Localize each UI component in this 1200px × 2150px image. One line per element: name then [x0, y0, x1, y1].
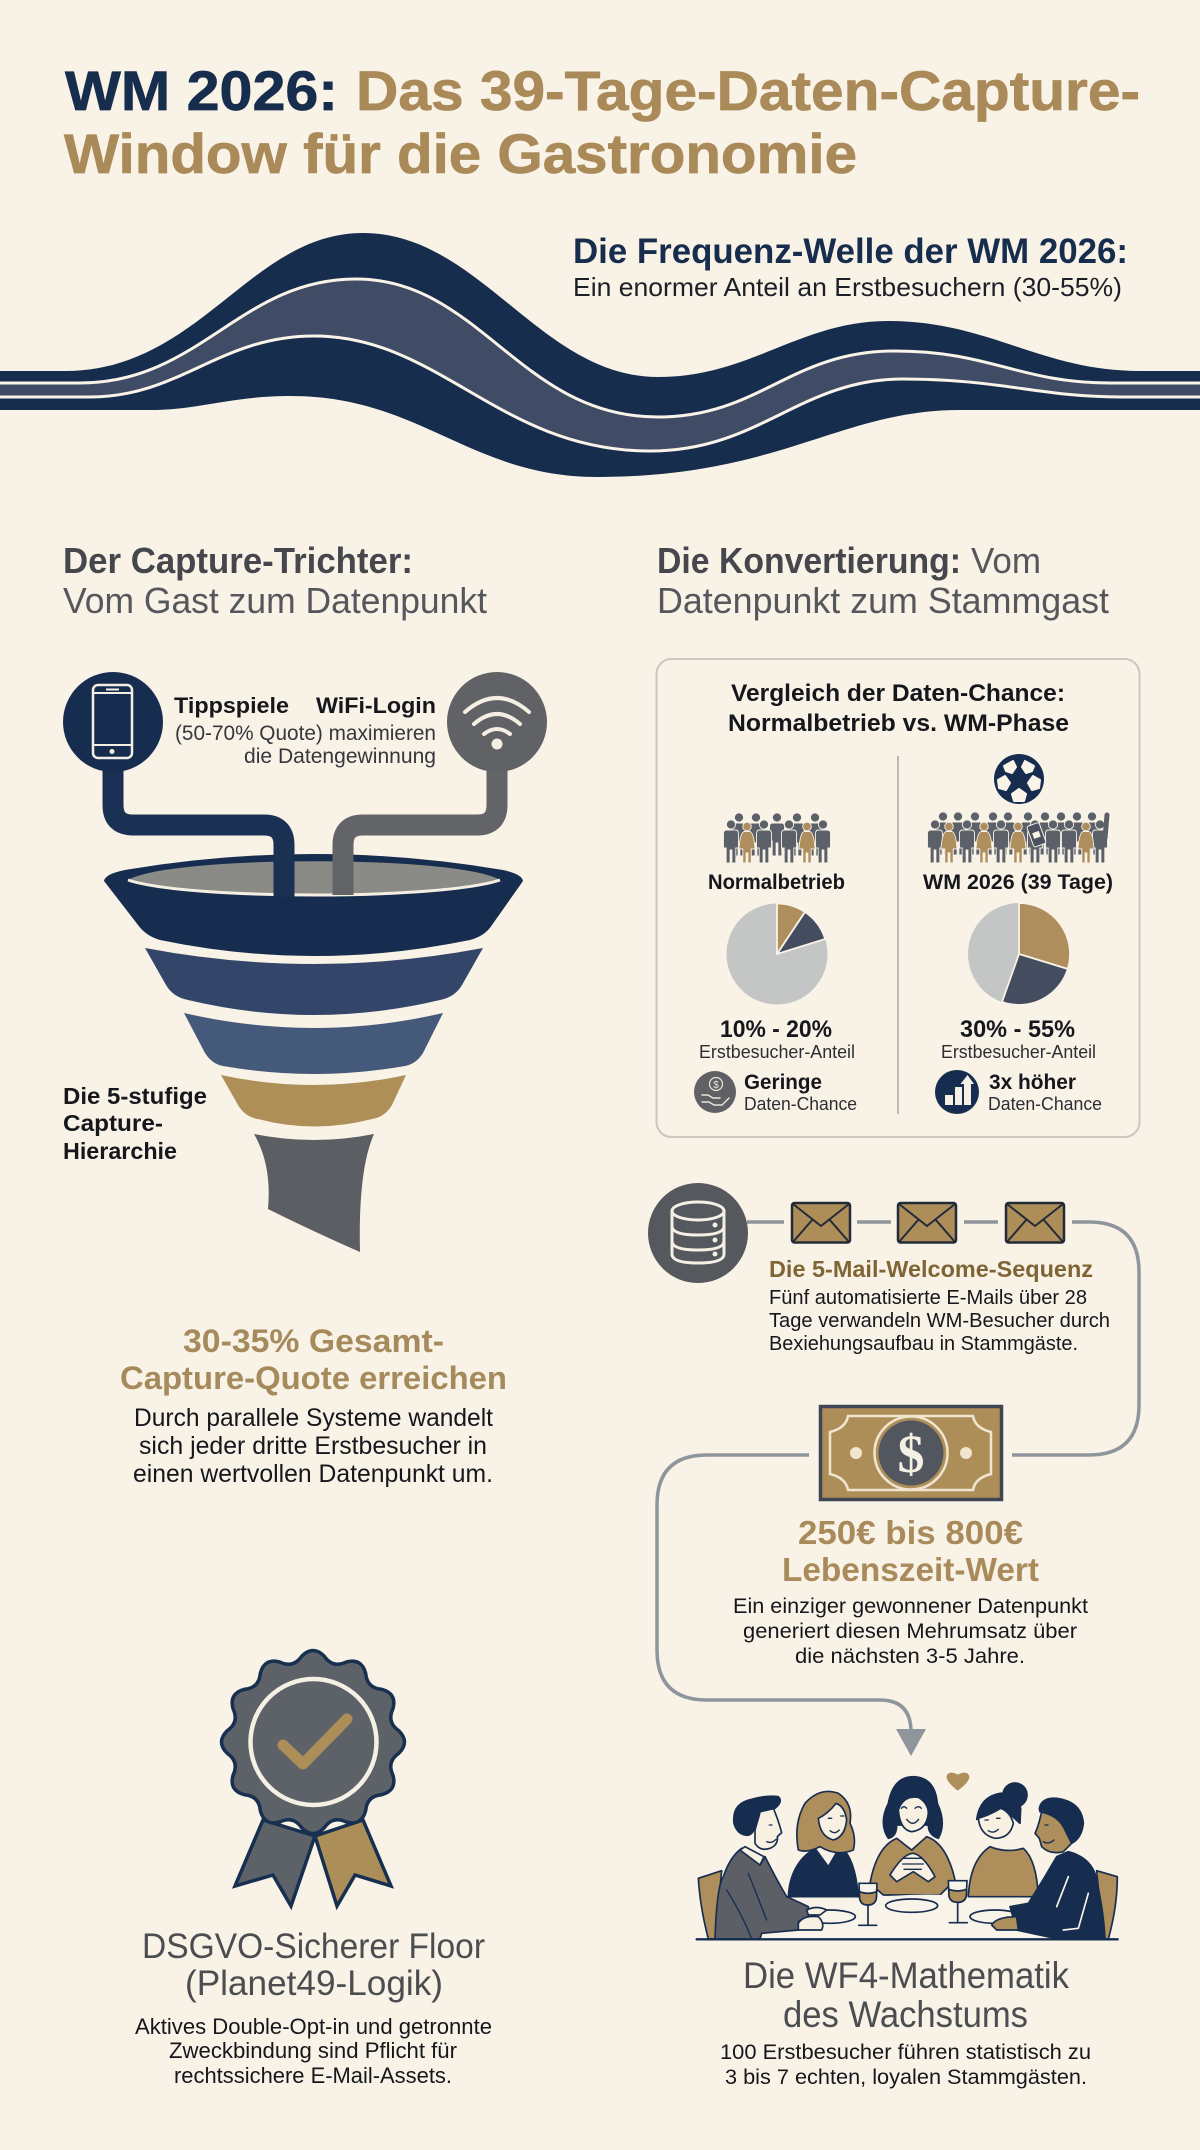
icon: rising bars — [935, 1070, 979, 1114]
text: lifetime value: die nächsten 3-5 Jahre. — [795, 1644, 1025, 1668]
funnel band 5 — [254, 1134, 374, 1252]
icon: banknote — [820, 1406, 1002, 1500]
seal — [222, 1650, 404, 1834]
title — [64, 59, 1140, 185]
stat: normal share: 10% - 20% — [720, 1016, 832, 1043]
text: funnel label: Capture- — [63, 1110, 163, 1136]
text: capture channels: die Datengewinnung — [244, 745, 436, 768]
heading: capture funnel: Der Capture-Trichter: — [63, 540, 413, 581]
heart — [947, 1773, 969, 1791]
icon: wifi — [447, 672, 547, 772]
wave heading: Die Frequenz-Welle der WM 2026: — [573, 232, 1128, 271]
stat: WM share: Erstbesucher-Anteil — [941, 1042, 1096, 1062]
wave heading — [573, 232, 1128, 302]
text: GDPR — [135, 1927, 492, 2088]
funnel band 4 — [221, 1075, 406, 1126]
label: normal: Normalbetrieb — [708, 871, 845, 894]
text: capture channels: Tippspiele — [174, 693, 289, 718]
pie chart: normal — [726, 904, 828, 1004]
text: capture quote: Capture-Quote erreichen — [120, 1360, 507, 1396]
text: capture quote — [120, 1323, 507, 1488]
text: funnel label: Hierarchie — [63, 1138, 177, 1164]
text: WF4 math: des Wachstums — [783, 1994, 1028, 2035]
text: funnel label: Die 5-stufige — [63, 1083, 207, 1109]
icon: mail 3 — [1006, 1203, 1064, 1242]
heading: conversion — [657, 540, 1109, 621]
icon: large crowd — [928, 812, 1108, 863]
funnel band 1 with opening — [104, 854, 523, 956]
guest: woman with bun — [968, 1783, 1038, 1897]
table top — [760, 1895, 1058, 1939]
text: GDPR: DSGVO-Sicherer Floor — [142, 1927, 485, 1966]
icon: low chance hand — [694, 1071, 736, 1113]
heading: capture funnel — [63, 540, 487, 621]
icon: mail 1 — [792, 1203, 850, 1242]
text: low chance: Daten-Chance — [744, 1094, 857, 1114]
illustration: guests at table — [697, 1773, 1118, 1939]
guest: man left — [715, 1796, 827, 1939]
text: welcome sequence: Bexiehungsaufbau in Stammgäste. — [769, 1333, 1078, 1355]
icon: GDPR seal — [222, 1650, 404, 1906]
text: capture quote: 30-35% Gesamt- — [183, 1323, 444, 1359]
arrow: flow from money to guests — [657, 1455, 926, 1756]
heading: conversion: Datenpunkt zum Stammgast — [657, 580, 1109, 621]
stat: WM share — [941, 1016, 1096, 1062]
text: low chance: Geringe — [744, 1071, 822, 1094]
text: capture quote: sich jeder dritte Erstbesucher in — [139, 1432, 487, 1460]
heading: capture funnel: Vom Gast zum Datenpunkt — [63, 580, 487, 621]
guest: man right — [992, 1798, 1105, 1939]
ribbon right — [315, 1820, 391, 1906]
wine glasses — [859, 1881, 967, 1925]
text: low chance — [744, 1071, 857, 1114]
guest: woman left — [788, 1791, 858, 1897]
text: capture quote: einen wertvollen Datenpunkt um. — [133, 1460, 493, 1488]
text: capture channels — [174, 693, 436, 768]
text: lifetime value: Lebenszeit-Wert — [782, 1551, 1039, 1588]
pipe: wifi to funnel — [343, 760, 497, 895]
text: welcome sequence: Tage verwandeln WM-Besucher durch — [769, 1310, 1110, 1332]
chairs — [698, 1871, 1117, 1939]
text: GDPR: (Planet49-Logik) — [185, 1964, 443, 2003]
panel title — [728, 680, 1069, 737]
divider — [897, 756, 899, 1114]
icon: database — [648, 1183, 748, 1283]
icon: low chance hand: $ — [713, 1080, 719, 1091]
panel: comparison — [656, 659, 1140, 1137]
text: capture channels: WiFi-Login — [316, 693, 436, 718]
table edge — [697, 1936, 1118, 1943]
heading: conversion: Vom — [971, 540, 1041, 581]
text: high chance: 3x höher — [989, 1071, 1076, 1094]
chart: frequency wave — [0, 233, 1200, 477]
text: lifetime value — [733, 1514, 1088, 1668]
guest: center woman — [870, 1777, 955, 1895]
icon: small crowd — [724, 813, 830, 863]
title: Window für die Gastronomie — [64, 122, 857, 185]
panel title: Normalbetrieb vs. WM-Phase — [728, 710, 1069, 737]
funnel band 3 — [184, 1013, 443, 1074]
label: WM: WM 2026 (39 Tage) — [923, 871, 1113, 894]
text: welcome sequence — [769, 1256, 1110, 1355]
plates — [803, 1899, 1020, 1923]
arrow: flow from database through mails to money — [747, 1222, 1139, 1455]
text: high chance — [988, 1071, 1102, 1114]
stat: normal share — [699, 1016, 855, 1062]
text: welcome sequence: Die 5-Mail-Welcome-Sequenz — [769, 1256, 1093, 1282]
ribbon left — [235, 1820, 315, 1906]
text: capture quote: Durch parallele Systeme wandelt — [134, 1404, 493, 1432]
text: capture channels: (50-70% Quote) maximieren — [175, 722, 436, 745]
stat: normal share: Erstbesucher-Anteil — [699, 1042, 855, 1062]
panel title: Vergleich der Daten-Chance: — [731, 680, 1065, 707]
text: GDPR: Aktives Double-Opt-in und getronnte — [135, 2014, 492, 2039]
title: WM 2026: — [65, 59, 338, 122]
icon: phone — [63, 672, 163, 772]
text: WF4 math: 100 Erstbesucher führen statistisch zu — [720, 2040, 1091, 2064]
text: lifetime value: Ein einziger gewonnener Datenpunkt — [733, 1594, 1088, 1618]
text: high chance: Daten-Chance — [988, 1094, 1102, 1114]
heading: conversion: Die Konvertierung: — [657, 540, 961, 581]
pipe: phone to funnel — [113, 760, 284, 897]
icon: mail 2 — [898, 1203, 956, 1242]
stat: WM share: 30% - 55% — [960, 1016, 1075, 1043]
text: funnel label — [63, 1083, 207, 1164]
text: GDPR: rechtssichere E-Mail-Assets. — [174, 2063, 452, 2088]
text: lifetime value: 250€ bis 800€ — [798, 1514, 1023, 1551]
icon: football — [994, 754, 1044, 804]
text: welcome sequence: Fünf automatisierte E-Mails über 28 — [769, 1287, 1087, 1309]
text: WF4 math — [720, 1955, 1091, 2089]
text: lifetime value: generiert diesen Mehrumsatz über — [743, 1619, 1077, 1643]
icon: banknote: $ — [898, 1424, 924, 1484]
wave heading: Ein enormer Anteil an Erstbesuchern (30-55%) — [573, 272, 1122, 302]
text: GDPR: Zweckbindung sind Pflicht für — [169, 2038, 457, 2063]
funnel band 2 — [145, 948, 483, 1015]
funnel diagram — [104, 760, 523, 1252]
text: WF4 math: 3 bis 7 echten, loyalen Stammgästen. — [725, 2065, 1087, 2089]
title: Das 39-Tage-Daten-Capture- — [356, 59, 1140, 122]
check mark — [283, 1719, 347, 1764]
text: WF4 math: Die WF4-Mathematik — [743, 1955, 1069, 1996]
pie chart: WM — [968, 903, 1070, 1005]
